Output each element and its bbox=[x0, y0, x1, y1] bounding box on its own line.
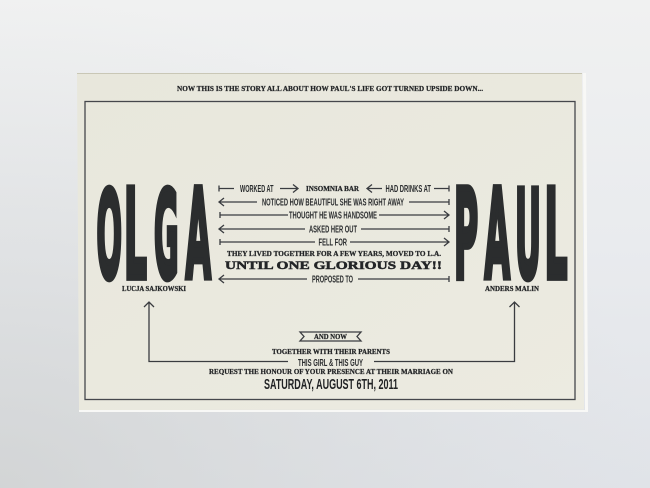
arrow: connector from names to this girl and this guy bbox=[144, 302, 520, 362]
row: thought: THOUGHT HE WAS HANDSOME bbox=[289, 210, 377, 222]
row: noticed bbox=[219, 198, 449, 208]
text: lived together: THEY LIVED TOGETHER FOR A FEW YEARS, MOVED TO L.A. bbox=[227, 250, 441, 258]
card border bbox=[85, 102, 575, 400]
row: fell for: FELL FOR bbox=[318, 238, 347, 248]
row: worked at / insomnia bar / had drinks at: INSOMNIA BAR bbox=[306, 185, 360, 193]
row: proposed to bbox=[219, 274, 449, 286]
caption: Anders Malin: ANDERS MALIN bbox=[485, 285, 539, 293]
name: OLGA: L bbox=[124, 165, 147, 307]
card bbox=[77, 73, 588, 412]
row: thought bbox=[220, 210, 449, 222]
name: PAUL: A bbox=[484, 164, 510, 308]
row: fell for bbox=[220, 238, 449, 248]
name: OLGA: O bbox=[96, 166, 122, 306]
date: SATURDAY, AUGUST 6TH, 2011 bbox=[264, 377, 398, 393]
caption: Lucja Sajkowski: LUCJA SAJKOWSKI bbox=[122, 285, 186, 293]
text: until one glorious day: UNTIL ONE GLORIOUS DAY!! bbox=[225, 258, 442, 272]
name: OLGA: G bbox=[154, 166, 179, 306]
name: OLGA: A bbox=[186, 164, 211, 308]
row: proposed to: PROPOSED TO bbox=[312, 274, 353, 286]
banner: and now bbox=[300, 332, 361, 341]
name: OLGA bbox=[96, 164, 211, 308]
name: PAUL bbox=[454, 164, 567, 308]
row: asked her out bbox=[219, 224, 449, 236]
name: PAUL: L bbox=[544, 165, 567, 307]
name: PAUL: P bbox=[454, 164, 478, 308]
text: this girl and this guy: THIS GIRL & THIS GUY bbox=[298, 358, 363, 369]
top line text: NOW THIS IS THE STORY ALL ABOUT HOW PAUL'S LIFE GOT TURNED UPSIDE DOWN... bbox=[177, 84, 483, 93]
name: PAUL: U bbox=[515, 165, 541, 306]
row: worked at / insomnia bar / had drinks at bbox=[219, 184, 449, 195]
row: worked at / insomnia bar / had drinks at: HAD DRINKS AT bbox=[386, 184, 431, 195]
banner: and now: AND NOW bbox=[314, 333, 347, 341]
row: noticed: NOTICED HOW BEAUTIFUL SHE WAS RIGHT AWAY bbox=[262, 198, 404, 208]
text: together with their parents: TOGETHER WITH THEIR PARENTS bbox=[272, 348, 390, 356]
row: worked at / insomnia bar / had drinks at: WORKED AT bbox=[240, 184, 274, 195]
text: request: REQUEST THE HONOUR OF YOUR PRESENCE AT THEIR MARRIAGE ON bbox=[209, 368, 453, 376]
row: asked her out: ASKED HER OUT bbox=[309, 224, 357, 236]
